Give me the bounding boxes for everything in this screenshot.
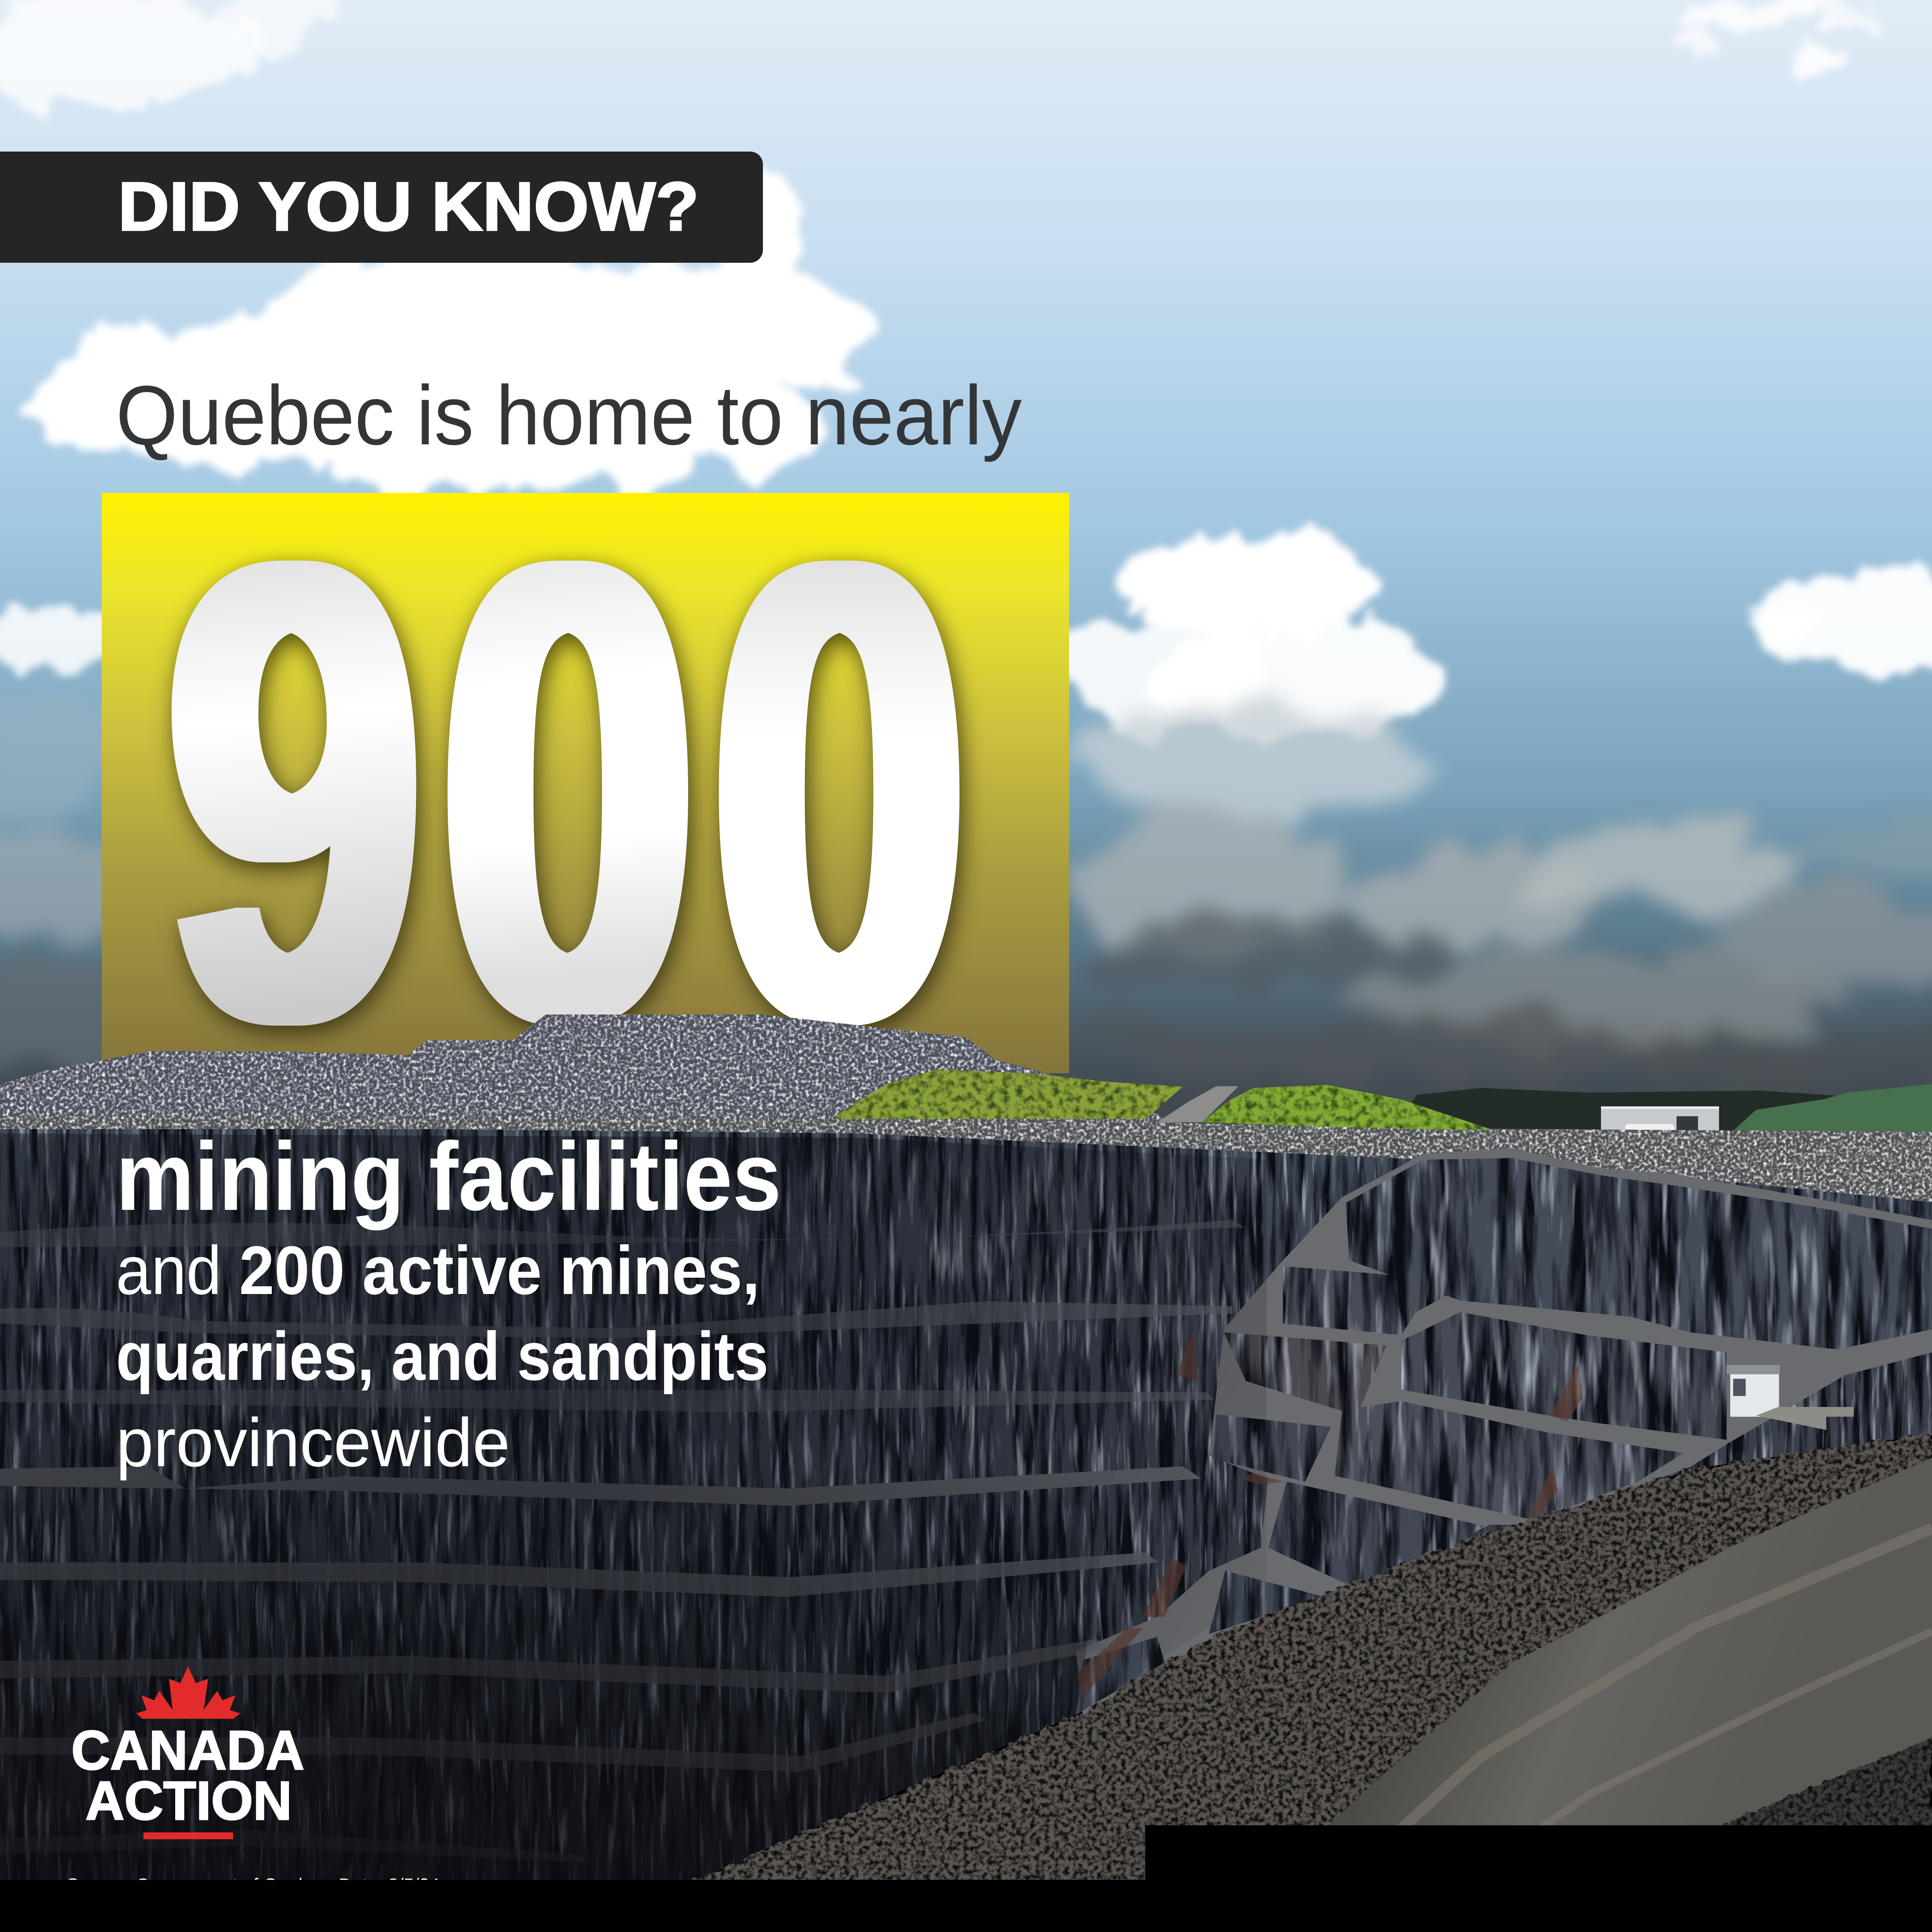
big number 900: 9 (167, 425, 422, 1159)
distant tree line (1395, 1084, 1932, 1136)
bench face 3 (1335, 1401, 1684, 1520)
provincewide: provincewide (116, 1404, 510, 1481)
white guard hut (1726, 1365, 1854, 1430)
source note: Source: Government of Quebec, Date: 8/5/24 (67, 1875, 440, 1896)
open pit mine walls (0, 1129, 1932, 1932)
pit base (0, 1129, 1932, 1932)
quarries line: quarries, and sandpits (116, 1318, 769, 1394)
yellow highlight panel (102, 493, 1069, 1073)
red rock staining (1076, 1329, 1583, 1697)
access road (1157, 1086, 1239, 1122)
big number 900: 0 (712, 425, 967, 1159)
right grass mound (1202, 1085, 1501, 1133)
bench face 1 (1346, 1158, 1932, 1349)
benches right side (1076, 1148, 1932, 1720)
rocky embankment (580, 1433, 1932, 1932)
big number 900 (167, 425, 967, 1159)
did you know banner (0, 152, 763, 263)
active mines line: and 200 active mines, (116, 1232, 760, 1309)
dark gradient over pit (0, 1133, 1267, 1932)
gravel plateau (0, 1116, 1932, 1215)
mining facilities: mining facilities (116, 1122, 781, 1230)
green embankments and access road (832, 1069, 1501, 1133)
haul road (1216, 1458, 1932, 1932)
horizontal strata left side (0, 1220, 1245, 1863)
road wheel tracks (1288, 1528, 1932, 1932)
shrub corner (1876, 1885, 1932, 1932)
bench face 8 (1209, 1571, 1324, 1634)
white clouds (0, 0, 1932, 735)
bench face 7 (1213, 1414, 1331, 1482)
sky background (0, 0, 1932, 1159)
big number 900: 0 (441, 425, 696, 1159)
bench face 6 (1224, 1332, 1386, 1416)
logo word canada: CANADA (71, 1719, 304, 1781)
logo word action: ACTION (85, 1770, 292, 1831)
bench face 4 (1268, 1482, 1484, 1585)
facility building (1601, 1106, 1719, 1133)
intro line: Quebec is home to nearly (116, 368, 1022, 462)
bench face 2 (1401, 1312, 1726, 1440)
left grass mound (832, 1069, 1183, 1119)
grey storm clouds (0, 690, 1932, 1089)
bench face 5 (1283, 1266, 1453, 1335)
lower dark gradient (0, 1460, 1116, 1932)
logo red underline (143, 1832, 233, 1839)
Canada Action logo (71, 1666, 304, 1839)
waste rock pile (0, 1015, 1185, 1133)
lower right rubble (1475, 1738, 1932, 1932)
icon: maple leaf (137, 1666, 240, 1719)
main statement text (116, 1122, 781, 1481)
banner heading: DID YOU KNOW? (118, 168, 699, 245)
bench face 9 (1076, 1637, 1165, 1714)
